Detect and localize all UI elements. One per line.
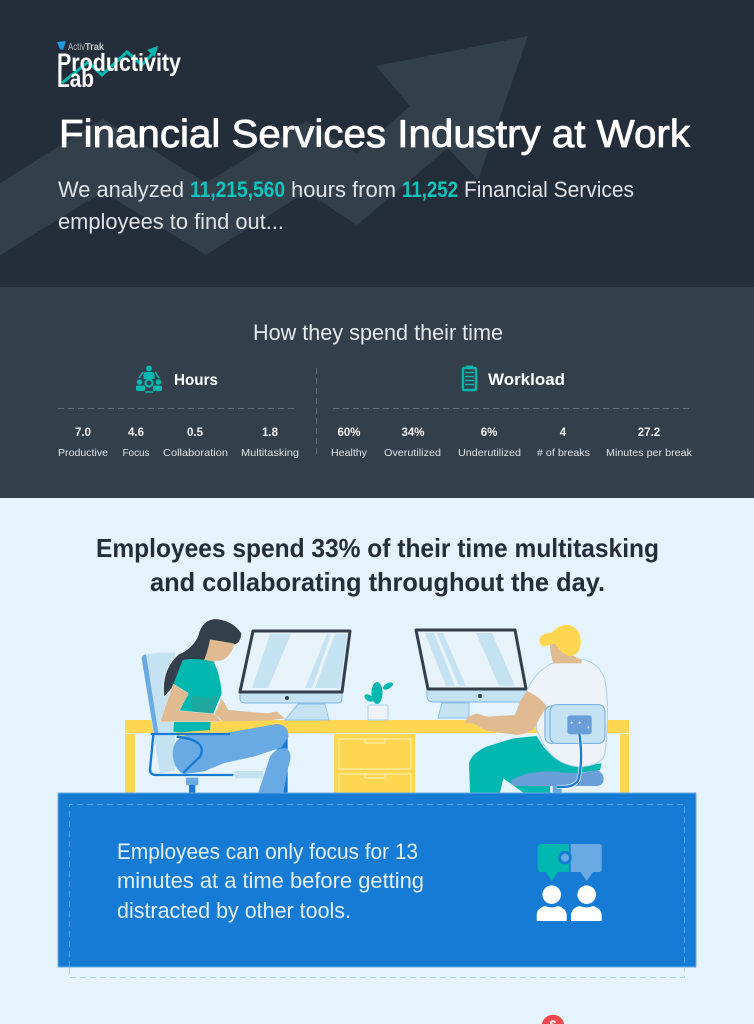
hours stats: 4.6 — [128, 427, 144, 439]
hours stats — [75, 427, 279, 439]
workload labels: Underutilized — [458, 447, 521, 459]
section heading: How they spend their time — [253, 320, 503, 345]
subtitle: We analyzed — [58, 177, 184, 202]
hours stats: 7.0 — [75, 427, 91, 439]
logo — [57, 41, 181, 93]
workload stats: 4 — [560, 427, 567, 439]
callout text: Employees can only focus for 13 — [117, 839, 418, 864]
callout text: distracted by other tools. — [117, 898, 351, 923]
workload stats: 60% — [337, 427, 361, 439]
workload stats: 27.2 — [638, 427, 660, 439]
hours stats: 0.5 — [187, 427, 204, 439]
logo: Trak — [85, 41, 104, 53]
illustration: plant — [363, 681, 394, 720]
logo: Activ — [68, 41, 86, 53]
panel: multitasking section — [0, 498, 754, 1024]
subtitle: employees to find out... — [58, 209, 284, 234]
hours labels — [58, 447, 299, 459]
callout text — [117, 839, 424, 923]
logo: Productivity — [57, 49, 181, 77]
main heading: Employees spend 33% of their time multitasking — [96, 533, 659, 563]
hours stats: 1.8 — [262, 427, 279, 439]
workload stats — [337, 427, 660, 439]
icon: workload battery — [463, 366, 476, 390]
main heading — [96, 533, 659, 597]
workload labels: Healthy — [331, 447, 368, 459]
panel: header — [0, 0, 754, 287]
workload stats: 34% — [401, 427, 425, 439]
subtitle — [58, 177, 634, 234]
title: Financial Services Industry at Work — [59, 113, 691, 156]
subtitle: 11,215,560 — [190, 177, 285, 202]
workload stats: 6% — [481, 427, 497, 439]
hours labels: Productive — [58, 447, 108, 459]
illustration: left monitor — [240, 631, 350, 720]
main heading: and collaborating throughout the day. — [150, 567, 605, 597]
callout panel — [58, 793, 696, 978]
icon: collaborating people — [537, 844, 602, 921]
workload heading: Workload — [488, 371, 565, 389]
illustration: desk — [125, 720, 629, 794]
hours heading: Hours — [174, 372, 218, 389]
workload labels: Minutes per break — [606, 447, 693, 459]
background arrow — [0, 36, 528, 255]
illustration: right monitor — [416, 630, 528, 718]
hours labels: Multitasking — [241, 447, 299, 459]
illustration: woman at desk — [142, 619, 290, 793]
subtitle: 11,252 — [402, 177, 458, 202]
hours labels: Focus — [122, 447, 150, 459]
panel: how they spend their time — [0, 287, 754, 498]
workload labels: Overutilized — [384, 447, 441, 459]
subtitle: hours from — [291, 177, 396, 202]
logo: Lab — [57, 65, 94, 93]
workload labels — [331, 447, 693, 459]
workload labels: # of breaks — [537, 447, 590, 459]
illustration: man at desk — [464, 625, 607, 793]
subtitle: Financial Services — [464, 177, 634, 202]
hours labels: Collaboration — [163, 447, 228, 459]
icon: hours team — [136, 366, 162, 392]
icon: red badge — [541, 1014, 565, 1024]
callout text: minutes at a time before getting — [117, 868, 424, 893]
